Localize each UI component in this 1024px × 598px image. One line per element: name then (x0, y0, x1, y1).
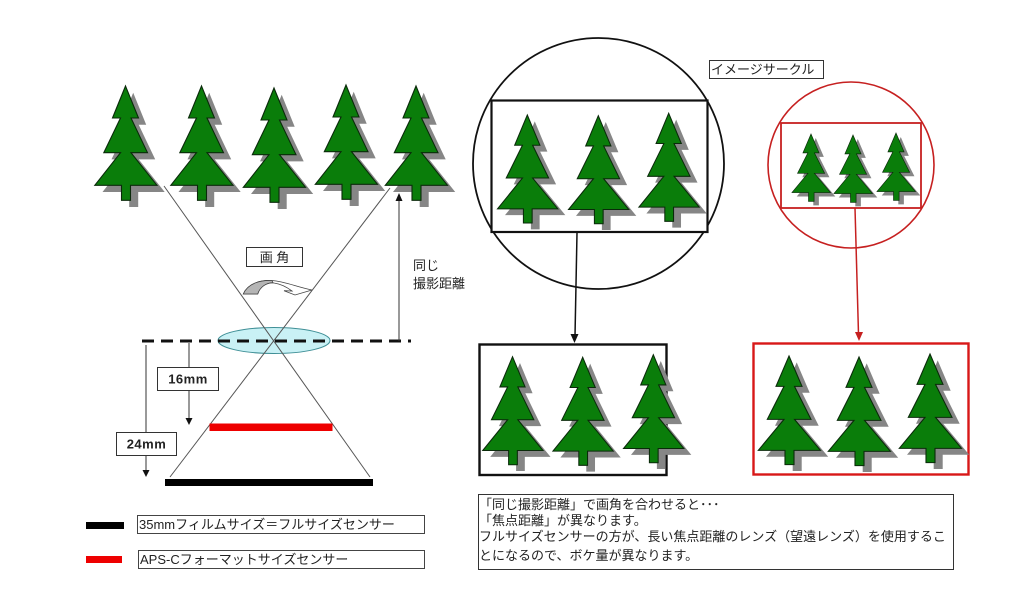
legend: APS-C sensor: APS-Cフォーマットサイズセンサー (140, 552, 348, 567)
arrow: same shooting distance (396, 193, 402, 341)
dashed lens plane (142, 340, 411, 342)
angle of view crossing lines (164, 186, 390, 477)
legend: full-size sensor (86, 516, 424, 534)
label: same shooting distance (413, 258, 465, 291)
label: 24mm: 24mm (127, 436, 166, 452)
lens (218, 328, 330, 354)
label: same shooting distance: 撮影距離 (413, 276, 465, 291)
arrow: black frame to output (570, 233, 578, 343)
row of trees: subject (95, 85, 455, 209)
label: same shooting distance: 同じ (413, 258, 439, 273)
label: image circle: イメージサークル (711, 62, 814, 77)
APS-C result frame (754, 344, 969, 474)
black image circle with frame (473, 38, 724, 289)
arrow: 16mm focal length (186, 343, 192, 425)
legend: APS-C sensor (86, 550, 424, 568)
explanation text box: とになるので、ボケ量が異なります。 (479, 548, 698, 563)
label: angle of view (246, 248, 302, 266)
explanation text box: 「同じ撮影距離」で画角を合わせると･･･ (479, 497, 720, 512)
arrow: red frame to output (855, 208, 863, 341)
label: 24mm (116, 432, 176, 456)
APS-C sensor bar (210, 424, 332, 431)
full-size result frame (480, 344, 691, 475)
explanation text box (478, 494, 954, 570)
label: 16mm (158, 368, 218, 390)
arrow: 24mm focal length (142, 345, 150, 477)
label: angle of view: 画 角 (260, 250, 289, 265)
legend: full-size sensor: 35mmフィルムサイズ＝フルサイズセンサー (139, 517, 395, 532)
label: 16mm: 16mm (168, 372, 208, 386)
explanation text box: フルサイズセンサーの方が、長い焦点距離のレンズ（望遠レンズ）を使用するこ (479, 529, 946, 544)
explanation text box: 「焦点距離」が異なります。 (479, 513, 647, 528)
icon: curved angle arrow (243, 280, 312, 295)
full-size sensor bar (165, 479, 373, 486)
red image circle with frame (768, 82, 934, 248)
